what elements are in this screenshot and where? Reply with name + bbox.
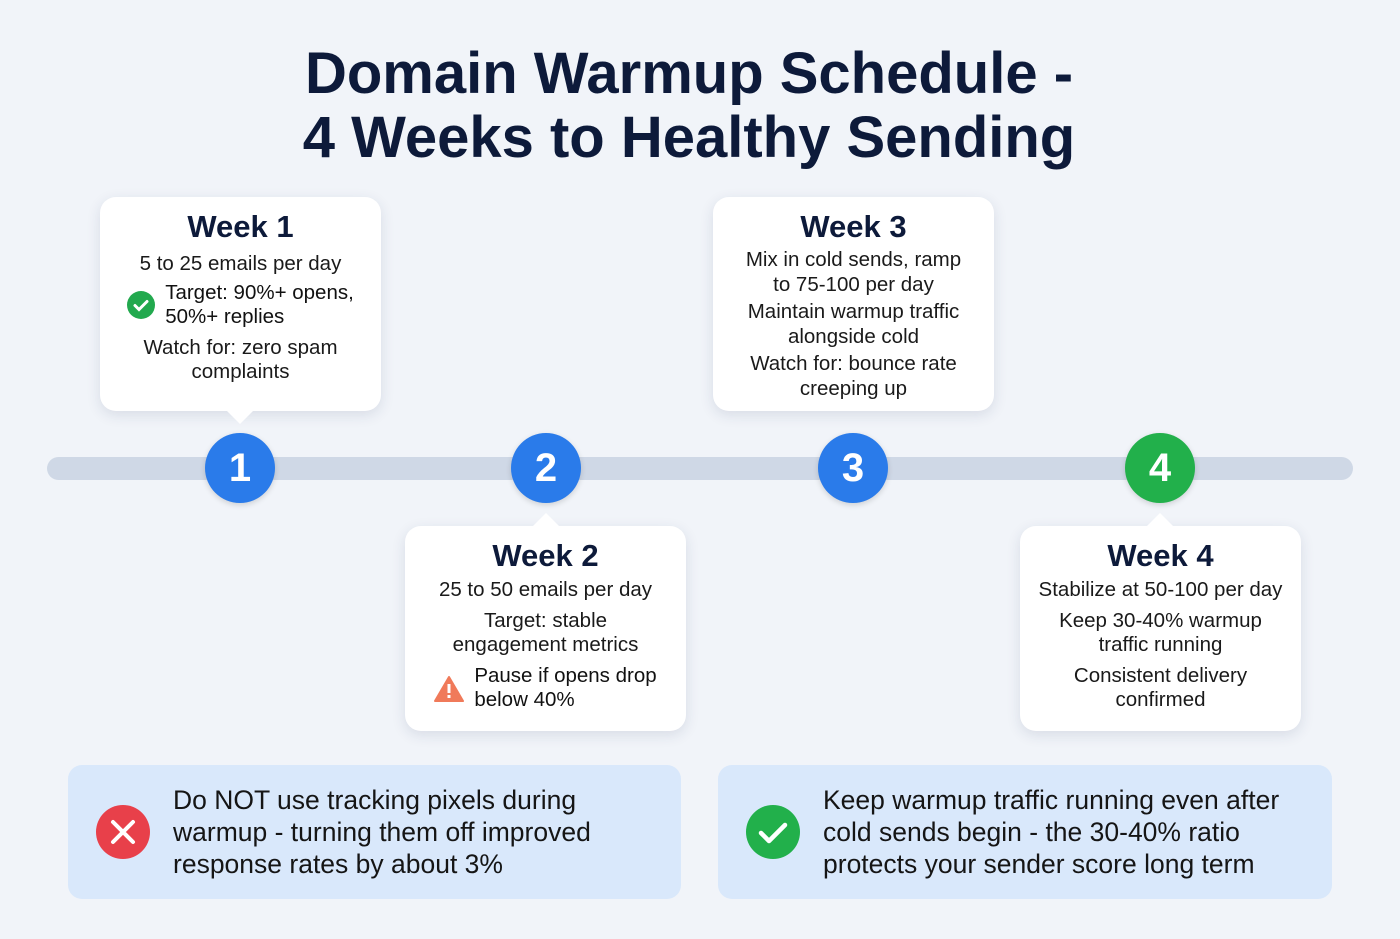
card: week 4: Consistent delivery [1074,664,1247,686]
node 2: 2 [535,446,557,490]
callout: keep warmup: cold sends begin - the 30-40% ratio [823,817,1240,847]
card: week 4: Keep 30-40% warmup [1059,608,1262,632]
card: week 1: 5 to 25 emails per day [140,252,341,275]
warning row: Pause if opens drop [474,664,657,686]
card: week 1: Watch for: zero spam [143,336,338,358]
node 3: 3 [842,446,864,490]
node 4: 4 [1149,446,1171,490]
callout: tracking pixels: Do NOT use tracking pixels during [173,785,576,815]
callout: tracking pixels [68,765,681,899]
card: week 2 [405,526,686,731]
warning row [434,664,657,711]
timeline bar [47,457,1353,480]
icon: green check [746,805,800,859]
card: week 1 [100,197,381,411]
card: week 3: Maintain warmup traffic [748,300,959,323]
callout: keep warmup: Keep warmup traffic running even after [823,785,1279,815]
card: week 2: Target: stable [484,608,607,632]
card: week 3: alongside cold [788,324,919,348]
card: week 2: engagement metrics [453,633,638,656]
callout: keep warmup: protects your sender score long term [823,849,1255,879]
card: week 3 [713,197,994,411]
node 1: 1 [229,446,251,490]
callout: tracking pixels: warmup - turning them off improved [173,817,591,847]
node 4 [1125,433,1195,503]
card: week 3: creeping up [800,376,907,400]
title: 4 Weeks to Healthy Sending [303,105,1075,170]
title: Domain Warmup Schedule - [305,41,1073,106]
icon: red x [96,805,150,859]
card: week 4: traffic running [1099,633,1222,656]
target row with check icon: Target: 90%+ opens, [165,280,354,304]
callout: keep warmup [718,765,1332,899]
node 3 [818,433,888,503]
card: week 4 [1020,526,1301,731]
target row with check icon: 50%+ replies [165,305,284,328]
title [303,41,1075,170]
card: week 3: Watch for: bounce rate [750,352,957,375]
card: week 1: complaints [192,360,290,383]
card: week 3: Mix in cold sends, ramp [746,248,961,271]
card: week 2: Week 2 [492,538,599,573]
card: week 1: Week 1 [187,209,294,244]
callout: tracking pixels: response rates by about 3% [173,849,503,879]
node 2 [511,433,581,503]
warning row: below 40% [474,688,575,711]
card: week 2: 25 to 50 emails per day [439,578,652,601]
target row with check icon [127,280,354,328]
card: week 4: Week 4 [1107,538,1214,573]
card: week 4: confirmed [1115,688,1206,711]
card: week 3: to 75-100 per day [773,272,934,296]
card: week 3: Week 3 [800,209,907,244]
node 1 [205,433,275,503]
card: week 4: Stabilize at 50-100 per day [1039,578,1282,601]
